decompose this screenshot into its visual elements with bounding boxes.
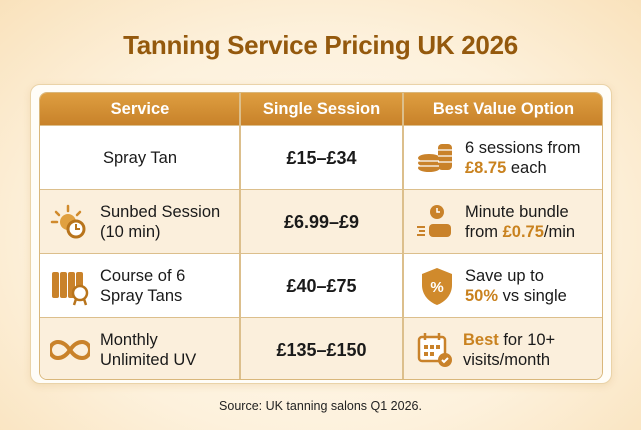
icon: coins [418,144,452,172]
row: monthly unlimited [40,317,604,381]
header: best value: Best Value Option [433,100,574,118]
best value [422,267,567,305]
service name: Spray Tans [100,287,182,305]
header: single session: Single Session [263,100,380,118]
best value [417,203,575,241]
icon: infinity [50,340,90,360]
title: Tanning Service Pricing UK 2026 [123,30,518,60]
price: £40–£75 [286,276,357,296]
icon: shield percent [422,268,452,305]
best value: visits/month [463,351,550,369]
price: £135–£150 [276,340,367,360]
icon: shield percent: % [430,279,444,296]
icon: clock bundle [417,205,451,237]
table [39,92,603,380]
header: service: Service [111,100,169,118]
best value: 50% vs single [465,287,567,305]
icon: calendar check [418,333,452,367]
price: £6.99–£9 [284,212,359,232]
best value: from £0.75/min [465,223,575,241]
source note: Source: UK tanning salons Q1 2026. [219,399,422,413]
service name: Sunbed Session [100,203,220,221]
best value: Minute bundle [465,203,569,221]
best value: 6 sessions from [465,139,581,157]
card background [30,84,612,384]
row: sunbed [40,189,604,253]
price: £15–£34 [286,148,357,168]
service name [50,203,220,241]
service name: Spray Tan [103,149,177,167]
header: service [40,93,240,125]
icon: sun timer [50,204,86,238]
icon: bottles with badge [52,272,88,306]
service name [52,267,185,306]
best value: Save up to [465,267,544,285]
service name: Monthly [100,331,158,349]
best value [418,331,555,369]
best value: Best for 10+ [463,331,555,349]
best value: £8.75 each [465,159,547,177]
row: spray tan [40,125,604,189]
best value [418,139,581,177]
header: best value [403,93,604,125]
service name: Course of 6 [100,267,185,285]
service name: (10 min) [100,223,161,241]
row: course [40,253,604,317]
service name: Unlimited UV [100,351,196,369]
service name [50,331,196,369]
header: single session [240,93,403,125]
